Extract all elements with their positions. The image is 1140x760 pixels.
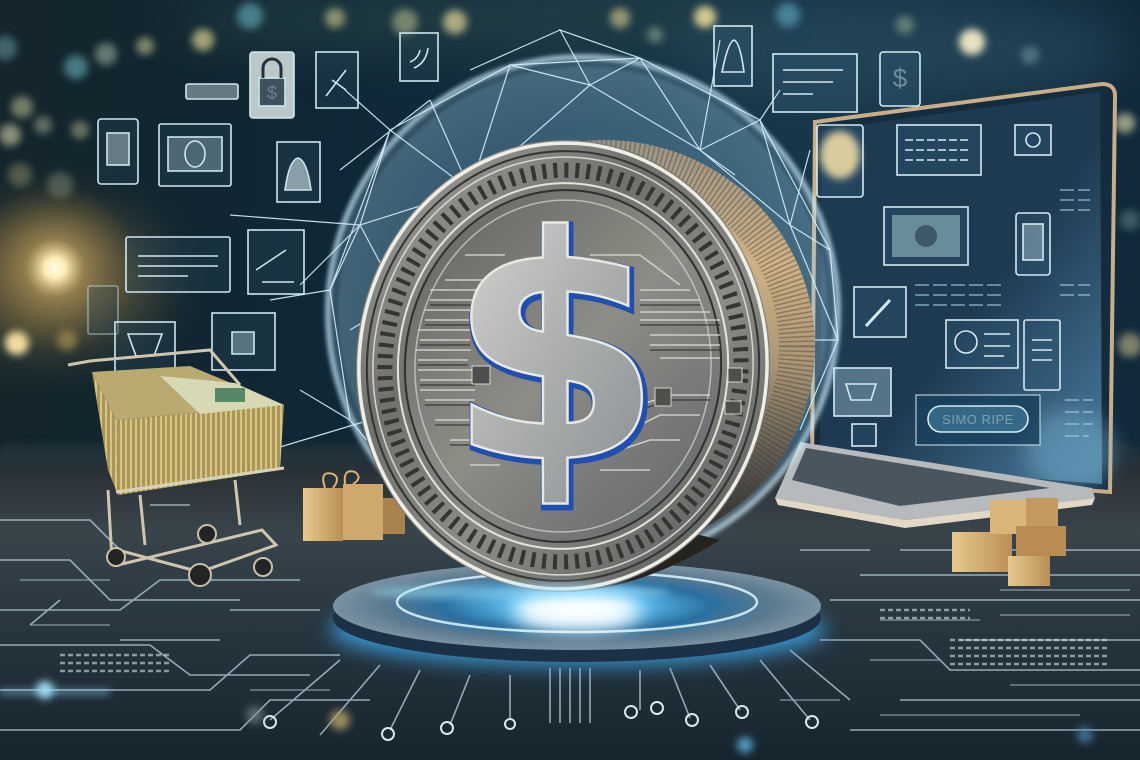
cash stack side [92, 372, 118, 495]
dollar sign: $ [447, 171, 663, 532]
laptop [775, 84, 1115, 528]
cart wire base [68, 350, 276, 572]
coin face [341, 126, 785, 606]
cart front rim [116, 468, 284, 492]
bokeh lights [0, 3, 1140, 357]
icon: eye badge [1015, 125, 1051, 155]
icon: banknote panel [884, 207, 968, 265]
icon: padlock card: $ [267, 83, 277, 103]
coin circuit engraving [416, 255, 720, 470]
platform glow [370, 584, 670, 624]
laptop keyboard base [775, 442, 1095, 520]
button: screen label [916, 395, 1040, 445]
button: screen label: SIMO RIPE [942, 412, 1014, 427]
icon: padlock card [250, 52, 294, 118]
icon: puzzle card [212, 313, 275, 370]
icon: image card [248, 230, 304, 294]
icon: table panel [897, 125, 981, 175]
icon: tool panel [854, 287, 906, 337]
icon: dollar badge: $ [893, 63, 908, 93]
icon: form card [126, 237, 230, 292]
coin rim lettering [372, 158, 754, 574]
dollar sign: $ [449, 174, 665, 535]
icon: wifi card [400, 33, 438, 81]
icon: small tablet [88, 286, 118, 334]
gift boxes right [952, 498, 1066, 586]
icon: leaf card [316, 52, 358, 108]
icon: banknote card [159, 124, 231, 186]
left light flare [0, 183, 140, 353]
floating icons: right group [714, 26, 1060, 446]
screen text lines [915, 190, 1093, 436]
icon: text panel [773, 54, 857, 112]
circuit nodes [264, 702, 818, 740]
platform [330, 562, 826, 666]
floating icons: left group [88, 33, 438, 372]
shopping cart [68, 350, 284, 586]
coin edge [395, 140, 815, 552]
floor text rows [60, 610, 1110, 671]
laptop screen [812, 84, 1115, 492]
coin [341, 126, 815, 606]
network globe [230, 30, 841, 570]
floor [0, 445, 1140, 760]
icon: bag card [115, 322, 175, 372]
icon: bar card [186, 84, 238, 99]
icon: lock glow [817, 125, 863, 197]
icon: dollar badge [880, 52, 920, 106]
icon: card top [714, 26, 752, 86]
cart wheels [107, 525, 272, 586]
icon: phone card [98, 119, 138, 184]
cash stack front [116, 405, 284, 495]
icon: small tag [852, 424, 876, 446]
circuit traces [0, 505, 1140, 735]
icon: cart panel [834, 368, 891, 416]
icon: phone right [1024, 320, 1060, 390]
floor glows [0, 681, 1093, 753]
gift boxes left [303, 471, 405, 541]
icon: bell card [277, 142, 320, 202]
cash stack top [92, 366, 284, 420]
icon: id panel [946, 320, 1018, 368]
icon: phone panel [1016, 213, 1050, 275]
coin chips [472, 366, 742, 414]
